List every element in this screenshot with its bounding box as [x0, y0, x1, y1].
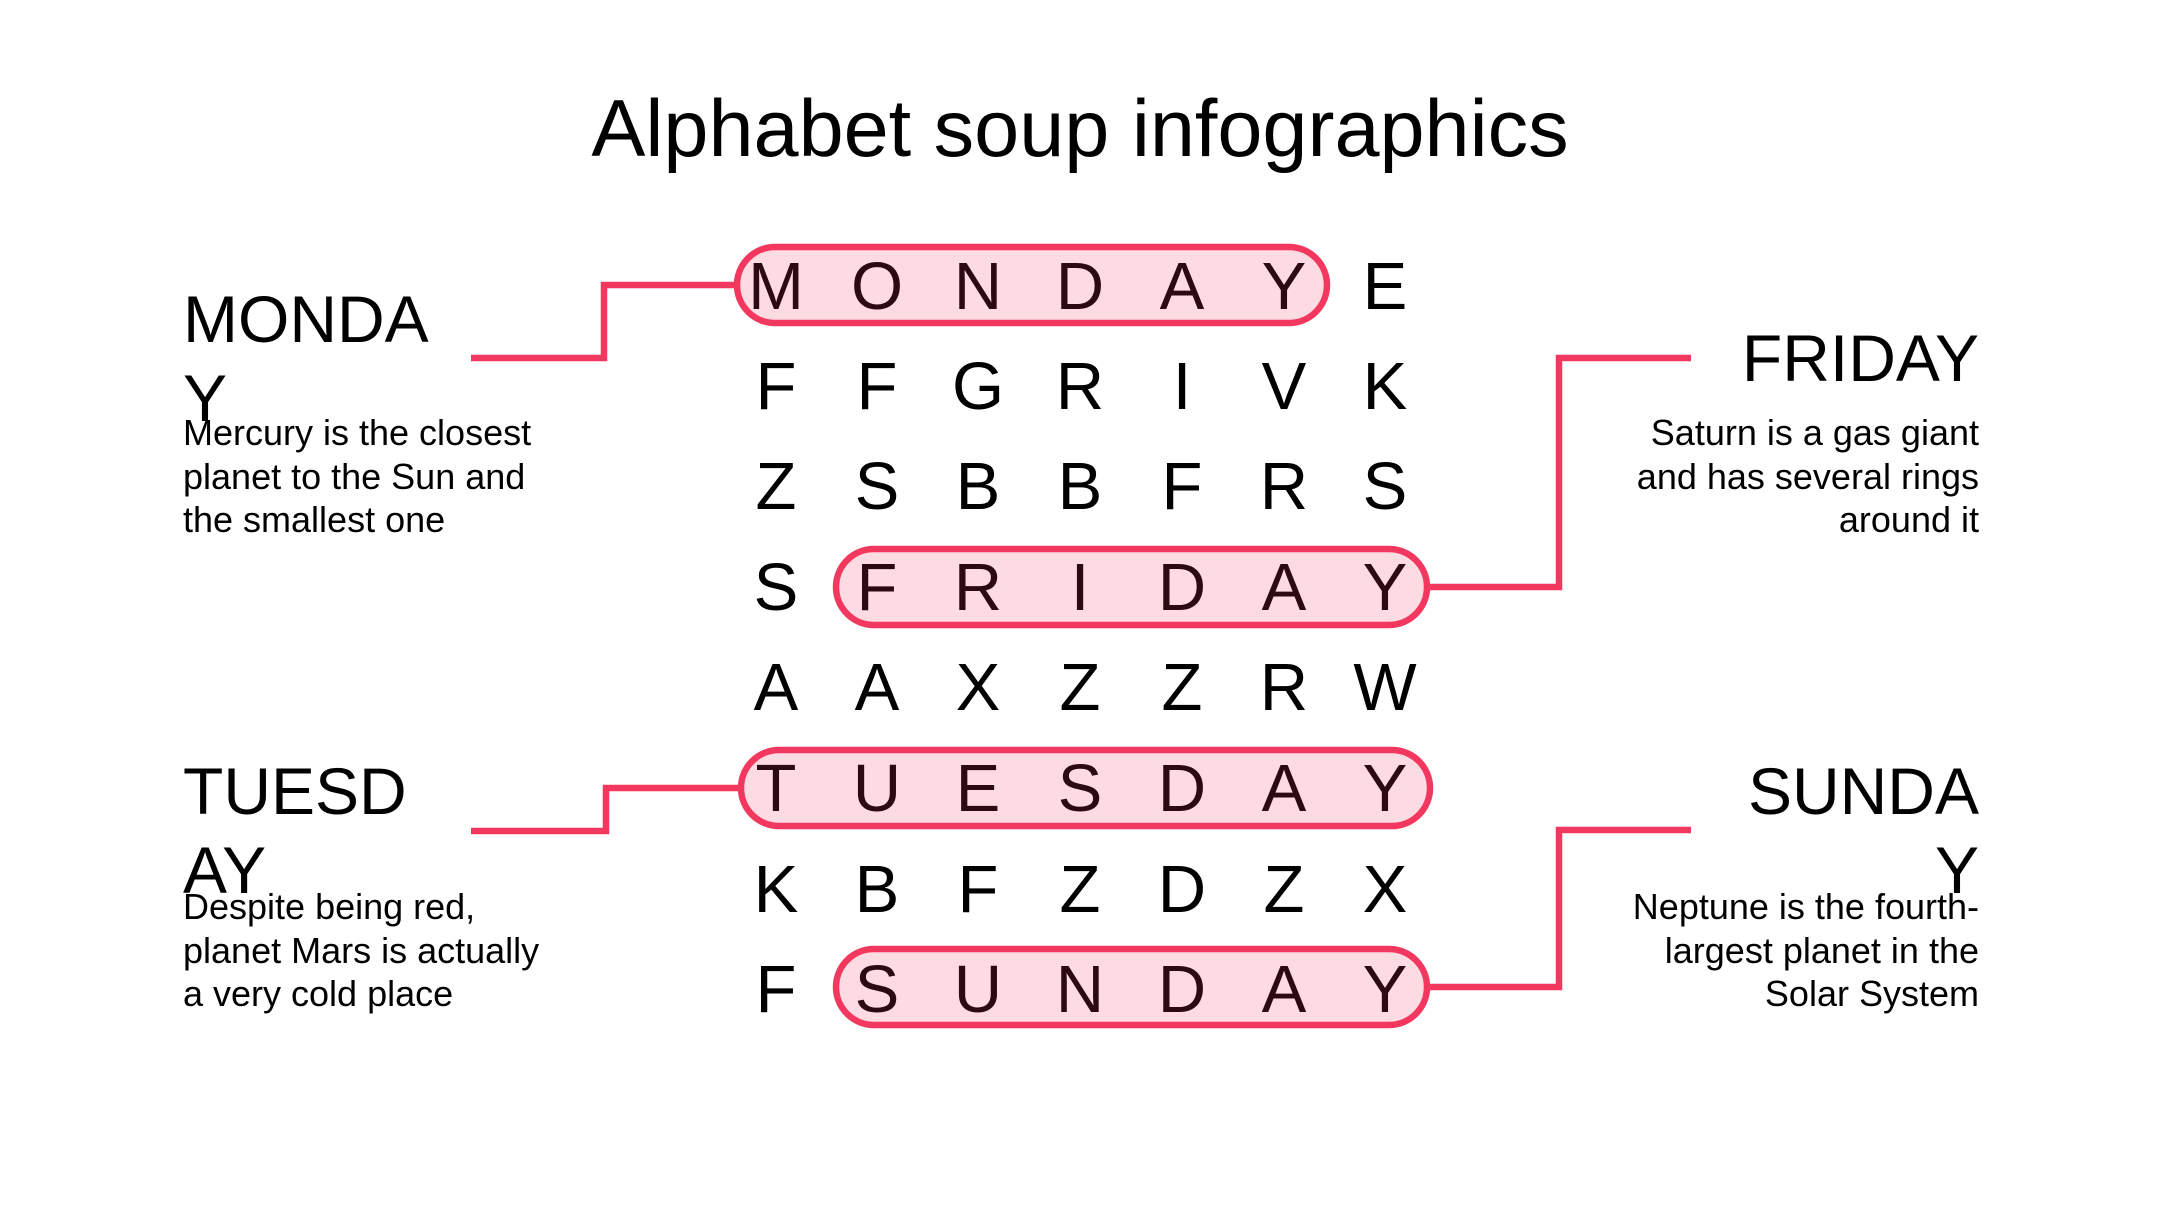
text: Mars: a very cold place: [183, 973, 453, 1014]
letter grid: N: [1056, 952, 1104, 1027]
letter grid: F: [857, 349, 897, 424]
letter grid: [748, 249, 1417, 1027]
letter grid: G: [952, 349, 1004, 424]
letter grid: B: [956, 449, 1000, 524]
letter grid: R: [1260, 449, 1308, 524]
heading: MONDAY: Y: [183, 361, 227, 435]
highlight: MONDAY: [737, 247, 1327, 323]
letter grid: F: [1162, 449, 1202, 524]
letter grid: O: [851, 249, 903, 324]
letter grid: S: [1363, 449, 1407, 524]
letter grid: I: [1071, 550, 1089, 625]
letter grid: A: [1262, 952, 1307, 1027]
text: Neptune: largest planet in the: [1665, 930, 1979, 971]
letter grid: X: [956, 650, 1000, 725]
text: Saturn: Saturn is a gas giant: [1651, 412, 1979, 453]
letter grid: I: [1173, 349, 1191, 424]
letter grid: M: [748, 249, 804, 324]
letter grid: R: [954, 550, 1002, 625]
letter grid: Z: [1060, 650, 1100, 725]
letter grid: A: [855, 650, 900, 725]
letter grid: A: [754, 650, 799, 725]
letter grid: Y: [1262, 249, 1306, 324]
letter grid: X: [1363, 852, 1407, 927]
connector: MONDAY: [471, 285, 737, 358]
connector: SUNDAY: [1427, 830, 1691, 987]
text: Mars: Despite being red,: [183, 886, 475, 927]
highlight: TUESDAY: [741, 750, 1430, 826]
connector: TUESDAY: [471, 788, 741, 831]
letter grid: F: [958, 852, 998, 927]
letter grid: R: [1056, 349, 1104, 424]
connector: FRIDAY: [1427, 358, 1691, 587]
letter grid: E: [1363, 249, 1407, 324]
letter grid: S: [855, 952, 899, 1027]
heading: SUNDAY: SUNDA: [1748, 754, 1979, 828]
letter grid: Y: [1363, 550, 1407, 625]
text: Neptune: Neptune is the fourth-: [1633, 886, 1979, 927]
letter grid: D: [1056, 249, 1104, 324]
letter grid: Y: [1363, 751, 1407, 826]
letter grid: Z: [1162, 650, 1202, 725]
highlight: SUNDAY: [836, 949, 1427, 1025]
title: Alphabet soup infographics: [591, 84, 1569, 174]
letter grid: K: [1363, 349, 1407, 424]
letter grid: N: [954, 249, 1002, 324]
letter grid: V: [1262, 349, 1307, 424]
letter grid: T: [756, 751, 796, 826]
heading: TUESDAY: TUESD: [183, 754, 407, 828]
text: Saturn: and has several rings: [1637, 456, 1979, 497]
letter grid: D: [1158, 751, 1206, 826]
letter grid: D: [1158, 550, 1206, 625]
heading: MONDAY: MONDA: [183, 282, 429, 356]
letter grid: U: [853, 751, 901, 826]
letter grid: U: [954, 952, 1002, 1027]
text: Mercury: the smallest one: [183, 499, 445, 540]
letter grid: D: [1158, 952, 1206, 1027]
heading: TUESDAY: AY: [183, 833, 266, 907]
letter grid: Z: [756, 449, 796, 524]
letter grid: E: [956, 751, 1000, 826]
letter grid: R: [1260, 650, 1308, 725]
letter grid: A: [1160, 249, 1205, 324]
text: Mars: planet Mars is actually: [183, 930, 539, 971]
text: Neptune: Solar System: [1765, 973, 1979, 1014]
text: Saturn: around it: [1839, 499, 1979, 540]
letter grid: B: [855, 852, 899, 927]
highlight: FRIDAY: [836, 549, 1427, 625]
text: Mercury: Mercury is the closest: [183, 412, 531, 453]
letter grid: W: [1353, 650, 1417, 725]
letter grid: A: [1262, 751, 1307, 826]
letter grid: S: [855, 449, 899, 524]
letter grid: F: [756, 952, 796, 1027]
letter grid: B: [1058, 449, 1102, 524]
letter grid: Z: [1060, 852, 1100, 927]
text: Mercury: planet to the Sun and: [183, 456, 525, 497]
letter grid: F: [857, 550, 897, 625]
letter grid: D: [1158, 852, 1206, 927]
heading: FRIDAY: FRIDAY: [1742, 321, 1979, 395]
letter grid: Y: [1363, 952, 1407, 1027]
letter grid: A: [1262, 550, 1307, 625]
letter grid: Z: [1264, 852, 1304, 927]
letter grid: S: [754, 550, 798, 625]
letter grid: F: [756, 349, 796, 424]
letter grid: S: [1058, 751, 1102, 826]
letter grid: K: [754, 852, 798, 927]
heading: SUNDAY: Y: [1935, 833, 1979, 907]
